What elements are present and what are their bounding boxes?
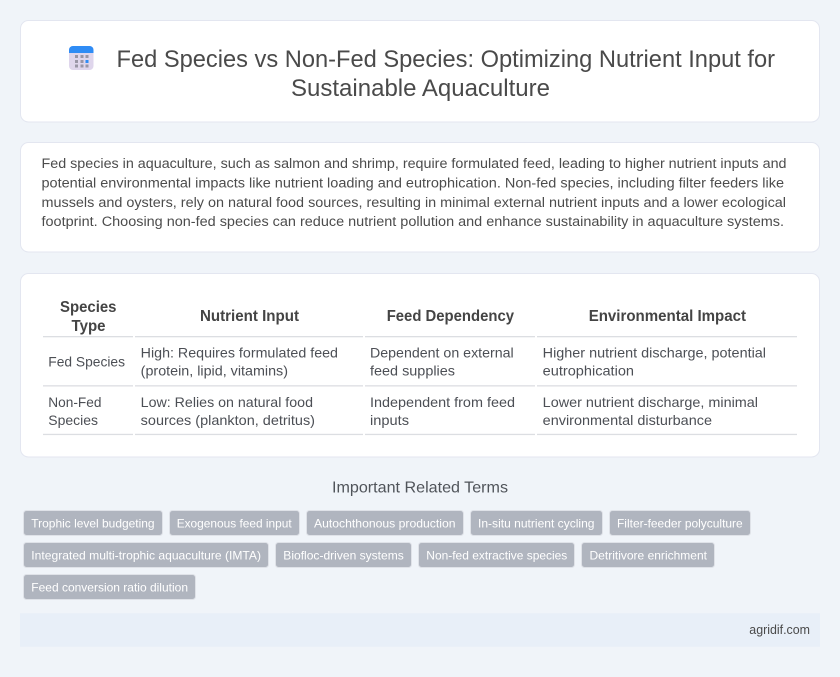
table row: fed species: eutrophication [543,363,634,379]
title: Sustainable Aquaculture [291,75,550,102]
tag: non-fed extractive species: Non-fed extractive species [426,548,567,562]
table header row [43,299,797,337]
table header row: Type [72,318,106,335]
tag: detritivore enrichment: Detritivore enrichment [590,548,708,562]
table row: non-fed species: sources (plankton, detritus) [141,412,315,428]
table header row: Nutrient Input [200,308,299,325]
tag: autochthonous production: Autochthonous production [314,516,456,530]
tag: detritivore enrichment [582,542,714,568]
footer source text: agridif.com [749,622,810,637]
table row: non-fed species: Lower nutrient discharge, minimal [543,394,758,410]
title [116,46,775,102]
heading: important related terms: Important Related Terms [332,480,508,497]
tag: exogenous feed input: Exogenous feed input [177,516,292,530]
table row: fed species: Fed Species [48,354,125,370]
table header row: Species [60,299,116,316]
table row: fed species [43,345,797,386]
table row: non-fed species: Independent from feed [370,394,515,410]
tag: in-situ nutrient cycling: In-situ nutrient cycling [478,516,594,530]
tag: filter-feeder polyculture [610,510,750,536]
tag: autochthonous production [306,510,464,536]
table row: non-fed species: Non-Fed [48,394,102,410]
related term tags [24,510,750,600]
table header row: Environmental Impact [589,308,746,325]
panel: description [20,142,820,252]
table row: fed species: Dependent on external [370,345,514,361]
intro paragraph: footprint. Choosing non-fed species can reduce nutrient pollution and enhance sustainability in aquaculture systems. [42,214,784,230]
tag: biofloc-driven systems [276,542,412,568]
tag: IMTA [24,542,268,568]
tag: trophic level budgeting: Trophic level budgeting [31,516,155,530]
icon: calendar [69,46,94,70]
table row: non-fed species: inputs [370,412,409,428]
intro paragraph: potential environmental impacts like nutrient loading and eutrophication. Non-fed species, including filter feeders like [42,175,784,191]
table row: non-fed species: environmental disturbance [543,412,712,428]
intro paragraph: mussels and oysters, rely on natural food sources, resulting in minimal external nutrient inputs and a lower ecological [42,195,786,211]
panel: comparison table [20,274,820,457]
intro paragraph [42,156,786,230]
title: Fed Species vs Non-Fed Species: Optimizing Nutrient Input for [116,46,775,73]
tag: feed conversion ratio dilution [24,574,196,600]
tag: IMTA: Integrated multi-trophic aquaculture (IMTA) [31,548,261,562]
table row: fed species: (protein, lipid, vitamins) [141,363,288,379]
panel: header [20,20,820,122]
table row: non-fed species: Species [48,412,98,428]
table row: fed species: High: Requires formulated feed [141,345,338,361]
intro paragraph: Fed species in aquaculture, such as salmon and shrimp, require formulated feed, leading to higher nutrient inputs and [42,156,786,172]
tag: non-fed extractive species [418,542,574,568]
tag: feed conversion ratio dilution: Feed conversion ratio dilution [31,580,188,594]
table row: non-fed species [43,394,797,435]
tag: in-situ nutrient cycling [470,510,602,536]
table row: fed species: Higher nutrient discharge, potential [543,345,766,361]
table header row: Feed Dependency [387,308,514,325]
tag: trophic level budgeting [24,510,162,536]
footer bar [20,613,820,647]
tag: biofloc-driven systems: Biofloc-driven systems [283,548,404,562]
table row: fed species: feed supplies [370,363,455,379]
tag: exogenous feed input [170,510,300,536]
table row: non-fed species: Low: Relies on natural food [141,394,313,410]
tag: filter-feeder polyculture: Filter-feeder polyculture [617,516,743,530]
